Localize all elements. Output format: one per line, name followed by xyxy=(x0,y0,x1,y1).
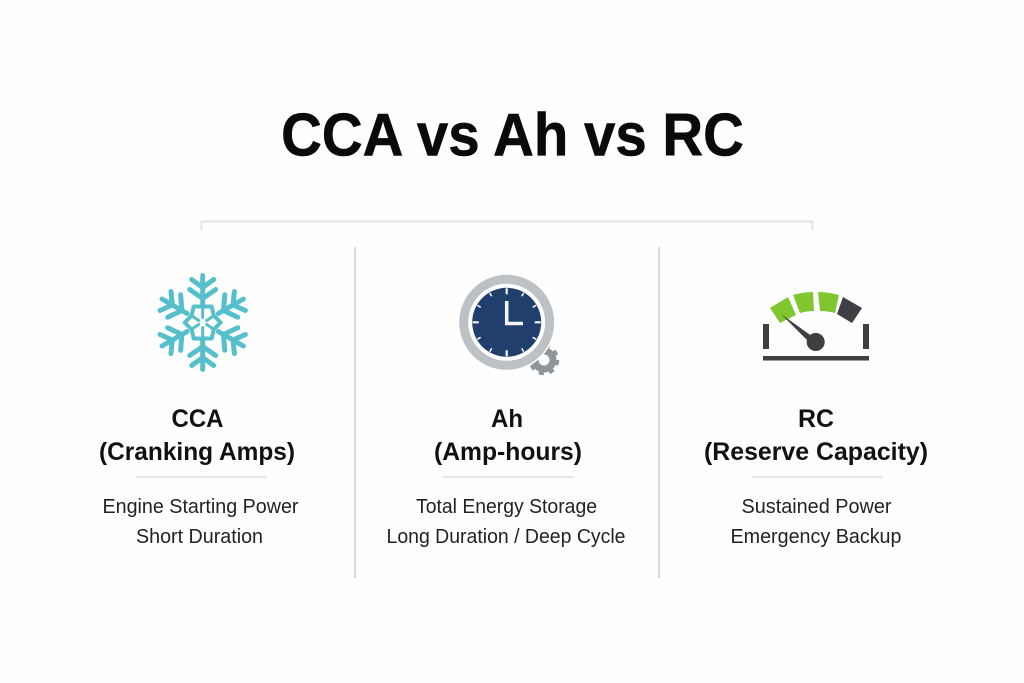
heading: Amp-hours: (Amp-hours) xyxy=(434,438,582,466)
icon: snowflake xyxy=(155,276,250,370)
text: long duration: Long Duration / Deep Cycle xyxy=(386,526,626,548)
rule xyxy=(443,476,574,478)
text: emergency backup: Emergency Backup xyxy=(730,526,902,548)
clock hands xyxy=(507,301,523,324)
gear xyxy=(531,347,557,373)
icon: clock with gear xyxy=(458,273,557,373)
clock ticks xyxy=(473,288,541,356)
gauge posts and base xyxy=(763,324,869,360)
text: sustained power: Sustained Power xyxy=(742,496,892,518)
heading: Reserve Capacity: (Reserve Capacity) xyxy=(704,438,928,466)
title: CCA vs Ah vs RC xyxy=(281,102,744,169)
panel: Ah xyxy=(386,273,626,548)
heading: CCA: CCA xyxy=(172,405,224,433)
gauge segments xyxy=(770,297,796,323)
column divider left xyxy=(354,247,356,578)
heading: RC: RC xyxy=(798,405,834,433)
text: short duration: Short Duration xyxy=(136,526,263,548)
text: total energy storage: Total Energy Storage xyxy=(416,496,597,518)
column divider right xyxy=(658,247,660,578)
icon: gauge xyxy=(763,292,869,360)
rule xyxy=(752,476,883,478)
panel: RC xyxy=(704,292,928,548)
top bracket xyxy=(202,222,812,230)
text: engine starting power: Engine Starting Power xyxy=(102,496,299,518)
rule xyxy=(136,476,267,478)
panel: CCA xyxy=(99,276,299,548)
heading: Ah: Ah xyxy=(491,405,523,433)
needle xyxy=(781,314,813,343)
heading: Cranking Amps: (Cranking Amps) xyxy=(99,438,295,466)
